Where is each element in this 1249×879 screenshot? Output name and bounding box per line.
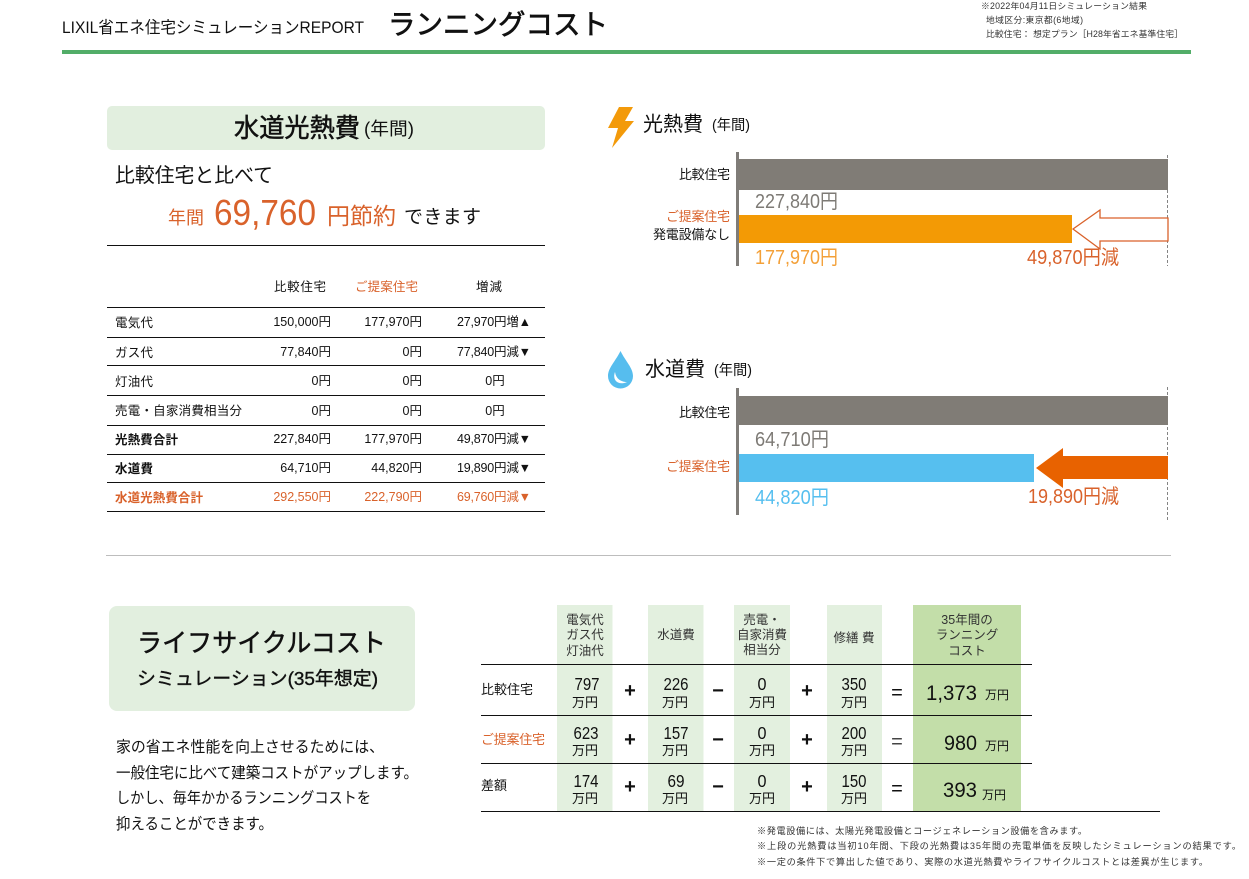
row: electricity: 27,970円増▲: [457, 315, 531, 329]
row: comparison house: 万円: [985, 688, 1009, 702]
row: power sales: 0円: [403, 404, 422, 418]
row: energy total: 227,840円: [273, 432, 331, 446]
simulation notes: [981, 0, 1183, 39]
row: kerosene: 0円: [312, 374, 331, 388]
column headers: 自家消費: [737, 627, 787, 642]
table header: 増減: [476, 279, 502, 294]
row: water: 水道費: [115, 461, 153, 476]
report name: LIXIL省エネ住宅シミュレーションREPORT: [62, 18, 364, 37]
savings summary: できます: [404, 207, 481, 228]
bar values: 227,840円: [755, 191, 838, 213]
bar: proposed house: [739, 215, 1072, 243]
footnotes: ※発電設備には、太陽光発電設備とコージェネレーション設備を含みます。: [757, 825, 1087, 836]
row: kerosene: 0円: [403, 374, 422, 388]
row: difference: 万円: [749, 791, 775, 806]
bar: comparison house: [739, 159, 1168, 190]
row: electricity: 177,970円: [364, 315, 422, 329]
bar values: 19,890円減: [1028, 485, 1119, 508]
water chart heading: 水道費: [645, 358, 705, 381]
row: power sales: [115, 403, 505, 418]
row: comparison house: +: [624, 680, 636, 702]
bar values: [755, 429, 1119, 509]
row: power sales: 売電・自家消費相当分: [115, 403, 242, 418]
bar: proposed house: [739, 454, 1034, 482]
panel: lifecycle cost heading: シミュレーション(35年想定): [137, 668, 378, 689]
energy chart heading: (年間): [712, 117, 750, 134]
table header: [274, 279, 502, 294]
bar values: 64,710円: [755, 429, 829, 451]
row: electricity: [115, 315, 531, 330]
row: energy total: [115, 431, 531, 447]
row: energy total: 49,870円減▼: [457, 431, 531, 446]
panel: utility cost heading: 水道光熱費: [234, 113, 360, 143]
row: water: 44,820円: [371, 461, 422, 475]
row: comparison house: 万円: [572, 695, 598, 710]
row: proposed house: 万円: [572, 743, 598, 758]
row: grand total: 69,760円減▼: [457, 489, 531, 504]
row: comparison house: [481, 674, 1009, 710]
footnotes: [757, 825, 1241, 867]
row: water: 19,890円減▼: [457, 460, 531, 475]
bar values: 44,820円: [755, 487, 829, 509]
column headers: ガス代: [566, 628, 604, 642]
bar values: 49,870円減: [1027, 246, 1119, 269]
column headers: ランニング: [936, 628, 998, 642]
row: water: 64,710円: [280, 461, 331, 475]
table header: 比較住宅: [274, 280, 326, 294]
report header: [62, 0, 1183, 40]
column headers: 灯油代: [566, 644, 604, 658]
row: kerosene: 灯油代: [115, 375, 153, 389]
table header: ご提案住宅: [355, 279, 418, 294]
row: proposed house: 万円: [985, 739, 1009, 753]
savings summary: 年間: [168, 208, 204, 228]
row: difference: 174: [574, 771, 599, 791]
row: difference: =: [891, 778, 903, 800]
row: difference: 万円: [662, 791, 688, 806]
row: comparison house: 797: [574, 674, 600, 694]
savings summary: [115, 164, 481, 233]
row: comparison house: 比較住宅: [481, 682, 533, 697]
water chart heading: (年間): [714, 362, 752, 379]
row: difference: 差額: [481, 778, 507, 793]
row: proposed house: +: [624, 729, 636, 751]
row: proposed house: 980: [944, 732, 977, 755]
panel: utility cost heading: [107, 106, 545, 150]
energy chart heading: [643, 113, 750, 136]
simulation notes: 地域区分:東京都(6地域): [986, 14, 1083, 25]
row: energy total: 177,970円: [364, 432, 422, 446]
row: proposed house: [481, 723, 1009, 758]
column headers: 売電・: [743, 612, 781, 627]
row: grand total: [115, 489, 531, 505]
bar values: [755, 191, 1119, 269]
row: electricity: 電気代: [115, 315, 153, 330]
row: proposed house: 万円: [662, 743, 688, 758]
lifecycle description: しかし、毎年かかるランニングコストを: [116, 789, 371, 807]
bar labels: ご提案住宅: [666, 209, 730, 224]
row: gas: 0円: [403, 345, 422, 359]
row: gas: ガス代: [115, 346, 153, 360]
row: proposed house: 200: [842, 723, 867, 743]
icon: water drop: [608, 351, 633, 388]
table: 35-year lifecycle cost: [481, 605, 1160, 812]
row: proposed house: +: [801, 729, 813, 751]
column headers: 修繕 費: [834, 630, 874, 645]
row: difference: 150: [842, 771, 867, 791]
row: proposed house: 0: [758, 723, 767, 743]
bar values: 177,970円: [755, 247, 838, 269]
row: comparison house: 万円: [841, 695, 867, 710]
row: proposed house: 623: [574, 723, 598, 743]
savings summary: 比較住宅と比べて: [115, 164, 273, 187]
row: difference: +: [624, 776, 636, 798]
column headers: コスト: [948, 644, 986, 658]
row: comparison house: 226: [664, 674, 688, 694]
lifecycle description: 一般住宅に比べて建築コストがアップします。: [116, 764, 418, 782]
row: difference: 0: [758, 771, 767, 791]
row: kerosene: 0円: [485, 374, 505, 388]
row: proposed house: 万円: [749, 743, 775, 758]
row: grand total: 水道光熱費合計: [115, 490, 203, 505]
column headers: [566, 612, 998, 658]
bar: comparison house: [739, 396, 1168, 425]
column backgrounds: [557, 605, 1021, 811]
column headers: 35年間の: [941, 613, 993, 627]
column headers: 電気代: [566, 612, 604, 627]
row: gas: 77,840円: [280, 345, 331, 359]
row: difference: −: [712, 776, 724, 798]
bar labels: 発電設備なし: [653, 227, 730, 242]
row: power sales: 0円: [485, 404, 505, 418]
row: water: [115, 460, 531, 476]
row: grand total: 292,550円: [273, 490, 331, 504]
row: proposed house: =: [891, 731, 903, 753]
row: kerosene: [115, 374, 505, 389]
row: difference: +: [801, 776, 813, 798]
row: electricity: 150,000円: [273, 315, 331, 329]
row: difference: 393: [943, 779, 977, 802]
arrow: water reduction: [1036, 448, 1168, 488]
water chart heading: [645, 358, 752, 381]
simulation notes: ※2022年04月11日シミュレーション結果: [981, 0, 1147, 11]
lifecycle description: [116, 738, 418, 833]
row: comparison house: +: [801, 680, 813, 702]
row: proposed house: 157: [664, 723, 688, 743]
row: comparison house: =: [891, 682, 903, 704]
bar labels: ご提案住宅: [666, 459, 730, 474]
row: difference: 万円: [982, 788, 1006, 802]
bar labels: 比較住宅: [679, 167, 730, 182]
row: comparison house: −: [712, 680, 724, 702]
row: comparison house: 万円: [749, 695, 775, 710]
column headers: 相当分: [743, 643, 781, 657]
lifecycle description: 抑えることができます。: [116, 815, 273, 833]
simulation notes: 比較住宅： 想定プラン［H28年省エネ基準住宅］: [986, 28, 1183, 39]
bar chart: energy cost: [653, 152, 1168, 269]
panel: lifecycle cost heading: ライフサイクルコスト: [137, 628, 386, 658]
row: comparison house: 350: [842, 674, 867, 694]
row: gas: [115, 344, 531, 360]
savings summary: 69,760: [214, 192, 316, 233]
footnotes: ※上段の光熱費は当初10年間、下段の光熱費は35年間の売電単価を反映したシミュレーションの結果です。: [757, 840, 1241, 851]
savings summary: 円節約: [327, 203, 396, 229]
arrow: energy reduction: [1073, 210, 1168, 249]
bar labels: [666, 405, 730, 474]
energy chart heading: 光熱費: [643, 113, 703, 136]
row: difference: 69: [668, 771, 684, 791]
row: proposed house: 万円: [841, 743, 867, 758]
row: comparison house: 万円: [662, 695, 688, 710]
row: power sales: 0円: [312, 404, 331, 418]
row: proposed house: −: [712, 729, 724, 751]
row: energy total: 光熱費合計: [115, 432, 178, 447]
bar labels: [653, 167, 730, 242]
row: difference: 万円: [841, 791, 867, 806]
bar chart: water cost: [666, 387, 1168, 520]
row: grand total: 222,790円: [364, 490, 422, 504]
lifecycle description: 家の省エネ性能を向上させるためには、: [116, 738, 384, 756]
row: gas: 77,840円減▼: [457, 344, 531, 359]
row: comparison house: 0: [758, 674, 767, 694]
row: difference: 万円: [572, 791, 598, 806]
panel: utility cost heading: (年間): [364, 119, 414, 139]
icon: lightning bolt: [608, 107, 634, 148]
row: comparison house: 1,373: [926, 682, 977, 705]
row: difference: [481, 771, 1006, 806]
title: ランニングコスト: [388, 9, 608, 40]
footnotes: ※一定の条件下で算出した値であり、実際の水道光熱費やライフサイクルコストとは差異が生じます。: [757, 856, 1208, 867]
bar labels: 比較住宅: [679, 405, 730, 420]
table: annual utility costs: [107, 279, 545, 512]
column headers: 水道費: [657, 627, 695, 642]
row: proposed house: ご提案住宅: [481, 732, 545, 747]
panel: lifecycle cost heading: [109, 606, 415, 711]
